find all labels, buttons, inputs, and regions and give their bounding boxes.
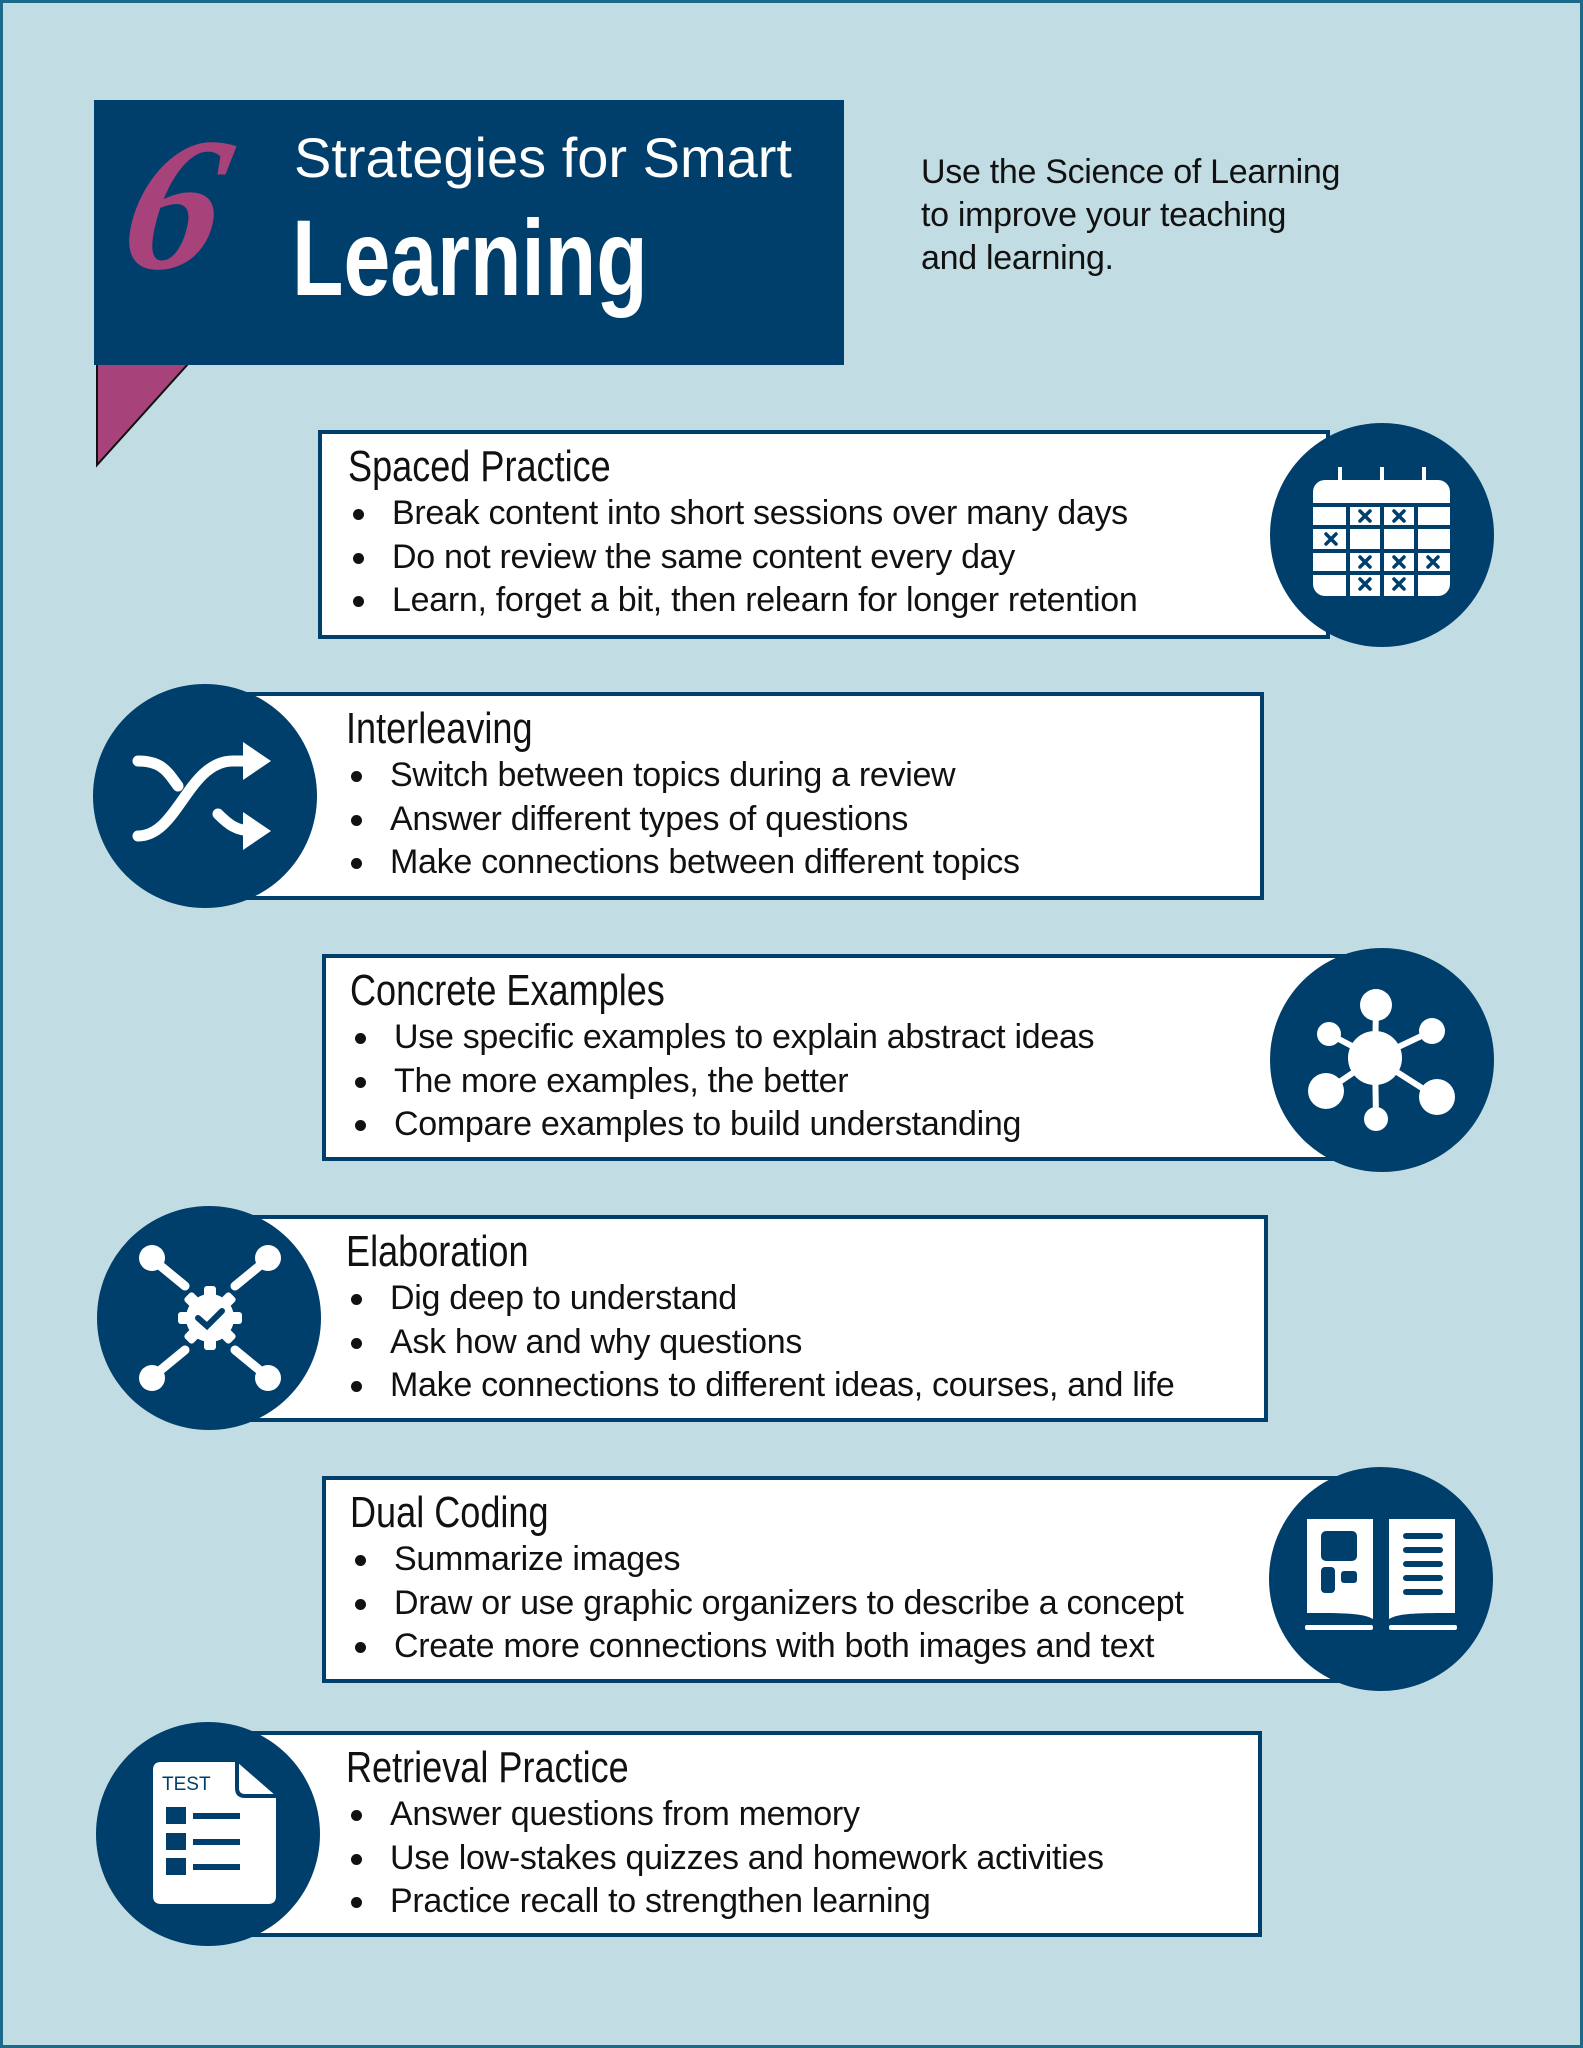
bullets: Use specific examples to explain abstract ideas — [394, 1018, 1094, 1056]
bullets — [351, 1795, 1104, 1920]
subtitle: Use the Science of Learning — [921, 153, 1340, 191]
panel: elaboration — [97, 1206, 1268, 1430]
header box — [94, 100, 844, 365]
bullets — [355, 1018, 1094, 1143]
bullets — [353, 494, 1138, 619]
heading: Dual Coding — [350, 1488, 549, 1537]
heading: Interleaving — [346, 704, 533, 753]
panel: interleaving — [93, 684, 1264, 908]
subtitle: and learning. — [921, 239, 1114, 277]
subtitle — [921, 153, 1340, 277]
bullets: Summarize images — [394, 1540, 680, 1578]
bullets — [355, 1540, 1184, 1665]
bullets: Dig deep to understand — [390, 1279, 737, 1317]
bullets: Draw or use graphic organizers to describe a concept — [394, 1584, 1183, 1622]
bullets: Make connections between different topics — [390, 843, 1020, 881]
subtitle: to improve your teaching — [921, 196, 1286, 234]
title line 2: Learning — [292, 197, 648, 318]
bullets: Switch between topics during a review — [390, 756, 955, 794]
bullets: Answer questions from memory — [390, 1795, 860, 1833]
heading: Spaced Practice — [348, 442, 611, 491]
title line 1: Strategies for Smart — [294, 126, 792, 189]
panel: concrete examples — [322, 948, 1494, 1172]
title block — [94, 100, 844, 468]
heading: Retrieval Practice — [346, 1743, 629, 1792]
bullets: Use low-stakes quizzes and homework activities — [390, 1838, 1104, 1876]
bullets: Compare examples to build understanding — [394, 1105, 1021, 1143]
bullets — [351, 756, 1020, 881]
icon: gear network — [97, 1206, 321, 1430]
panel: retrieval practice — [96, 1722, 1262, 1946]
big number 6: 6 — [107, 100, 246, 310]
pennant — [96, 365, 188, 468]
bullets: Practice recall to strengthen learning — [390, 1882, 930, 1920]
bullets: Answer different types of questions — [390, 800, 908, 838]
bullets: Ask how and why questions — [390, 1322, 802, 1360]
bullets: Learn, forget a bit, then relearn for longer retention — [392, 581, 1138, 619]
bullets: Create more connections with both images and text — [394, 1627, 1154, 1665]
icon: book — [1269, 1467, 1493, 1691]
panel: dual coding — [322, 1467, 1493, 1691]
bullets: Make connections to different ideas, courses, and life — [390, 1366, 1175, 1404]
bullets: Do not review the same content every day — [392, 538, 1015, 576]
bullets: Break content into short sessions over many days — [392, 494, 1128, 532]
bullets — [351, 1279, 1175, 1404]
icon: test sheet: TEST — [162, 1774, 211, 1795]
panel: spaced practice — [318, 423, 1494, 647]
icon: shuffle — [93, 684, 317, 908]
icon: test sheet — [96, 1722, 320, 1946]
heading: Elaboration — [346, 1227, 529, 1276]
heading: Concrete Examples — [350, 966, 665, 1015]
icon: calendar — [1270, 423, 1494, 647]
icon: network — [1270, 948, 1494, 1172]
bullets: The more examples, the better — [394, 1062, 848, 1100]
